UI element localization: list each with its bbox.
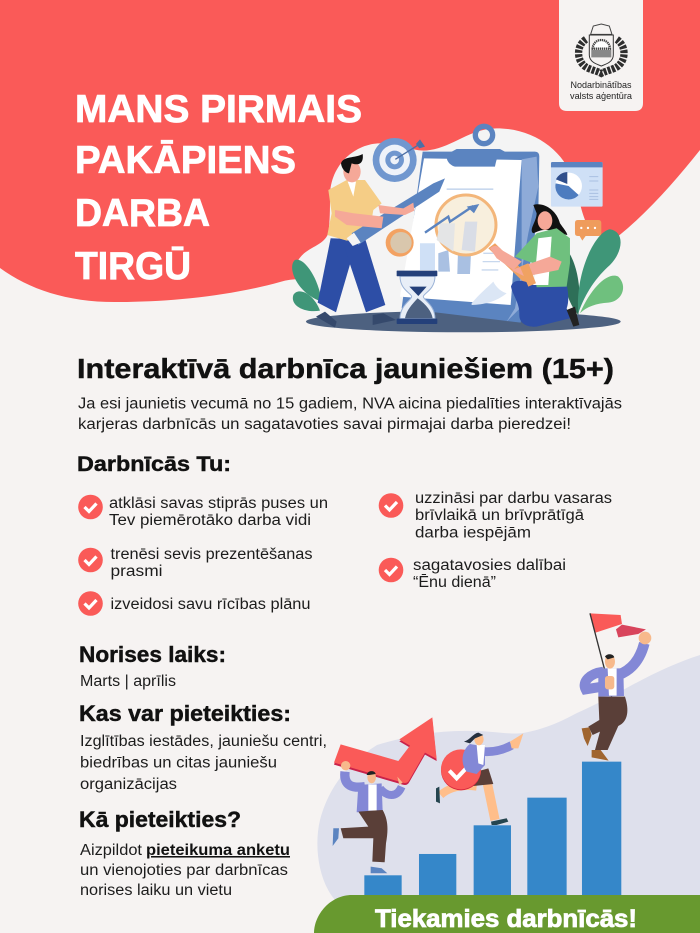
item: presenting [78, 546, 313, 580]
block: how to apply: un vienojoties par darbnīcas [80, 862, 288, 879]
item: action plan: izveidosi savu rīcības plānu [110, 596, 310, 613]
item: presenting: prasmi [110, 563, 162, 580]
pie chart card [551, 162, 603, 207]
illustration: team with clipboard [292, 126, 623, 332]
intro paragraph [78, 396, 622, 433]
section heading: Interaktīvā darbnīca jauniešiem (15+) [77, 353, 614, 384]
arms [335, 210, 383, 228]
checklist right column [379, 490, 612, 591]
speech bubble [575, 220, 601, 241]
item: job shadowing [379, 557, 566, 591]
item: strengths: Tev piemērotāko darba vidi [109, 512, 311, 529]
block: who can apply: Kas var pieteikties: [79, 701, 291, 726]
logo panel: valsts aģentūra [570, 90, 633, 101]
block: who can apply: biedrības un citas jauniešu [80, 754, 277, 772]
item: job shadowing: “Ēnu dienā” [413, 574, 496, 591]
running woman with check badge [436, 733, 523, 825]
item: summer work: brīvlaikā un brīvprātīgā [415, 507, 584, 524]
block: how to apply: norises laiku un vietu [80, 882, 232, 899]
item: presenting: trenēsi sevis prezentēšanas [110, 546, 313, 563]
block: time [79, 642, 226, 690]
woman with magnifier [490, 204, 579, 327]
call-to-action banner: Tiekamies darbnīcās! [375, 905, 637, 933]
item: summer work: uzzināsi par darbu vasaras [415, 490, 612, 507]
man with pencil [316, 154, 445, 328]
light blob background [295, 128, 618, 320]
target icon [373, 138, 425, 182]
bar steps [364, 762, 621, 899]
lilac hill background [317, 655, 700, 933]
block: how to apply: Aizpildot [80, 842, 143, 859]
right plants [564, 229, 623, 315]
red header shape [0, 0, 700, 302]
pencil [352, 178, 445, 245]
chart on paper [447, 188, 493, 190]
checklist left column [78, 495, 328, 616]
magnifier [425, 195, 535, 287]
icon: coat of arms [579, 24, 624, 73]
block: time: Marts | aprīlis [80, 673, 176, 690]
title: TIRGŪ [75, 245, 191, 288]
title: DARBA [75, 192, 210, 235]
block: how to apply: Kā pieteikties? [79, 807, 241, 832]
ground shadow [306, 311, 621, 332]
hourglass [397, 271, 437, 324]
left plants [292, 260, 333, 311]
block: time: Norises laiks: [79, 642, 226, 667]
title: PAKĀPIENS [75, 139, 296, 182]
item: strengths [78, 495, 328, 529]
illustration: career steps [333, 613, 651, 899]
clipboard [400, 126, 539, 323]
call-to-action banner [314, 895, 700, 933]
item: strengths: atklāsi savas stiprās puses un [109, 495, 328, 512]
item: summer work [379, 490, 612, 542]
block: who can apply: organizācijas [80, 776, 177, 793]
clip [475, 126, 493, 144]
block: who can apply: Izglītības iestādes, jauniešu centri, [80, 733, 327, 750]
title: MANS PIRMAIS [75, 88, 362, 131]
title [75, 88, 362, 288]
intro paragraph: Ja esi jaunietis vecumā no 15 gadiem, NVA aicina piedalīties interaktīvajās [78, 396, 622, 412]
item: action plan [78, 591, 310, 616]
red growth arrow [334, 717, 437, 785]
intro paragraph: karjeras darbnīcās un sagatavoties savai pirmajai darba pieredzei! [78, 416, 571, 433]
heading: Darbnīcās Tu: Darbnīcās Tu: [77, 452, 231, 476]
logo text: Nodarbinātības [570, 79, 632, 90]
item: summer work: darba iespējām [415, 524, 531, 542]
small coin [386, 229, 414, 257]
item: job shadowing: sagatavosies dalībai [413, 557, 566, 574]
block: how to apply: pieteikuma anketu [146, 842, 290, 859]
logo panel [559, 0, 643, 111]
man carrying arrow [333, 761, 403, 873]
man with flag [582, 613, 651, 761]
block: who can apply [79, 701, 327, 793]
block: how to apply [79, 807, 290, 899]
